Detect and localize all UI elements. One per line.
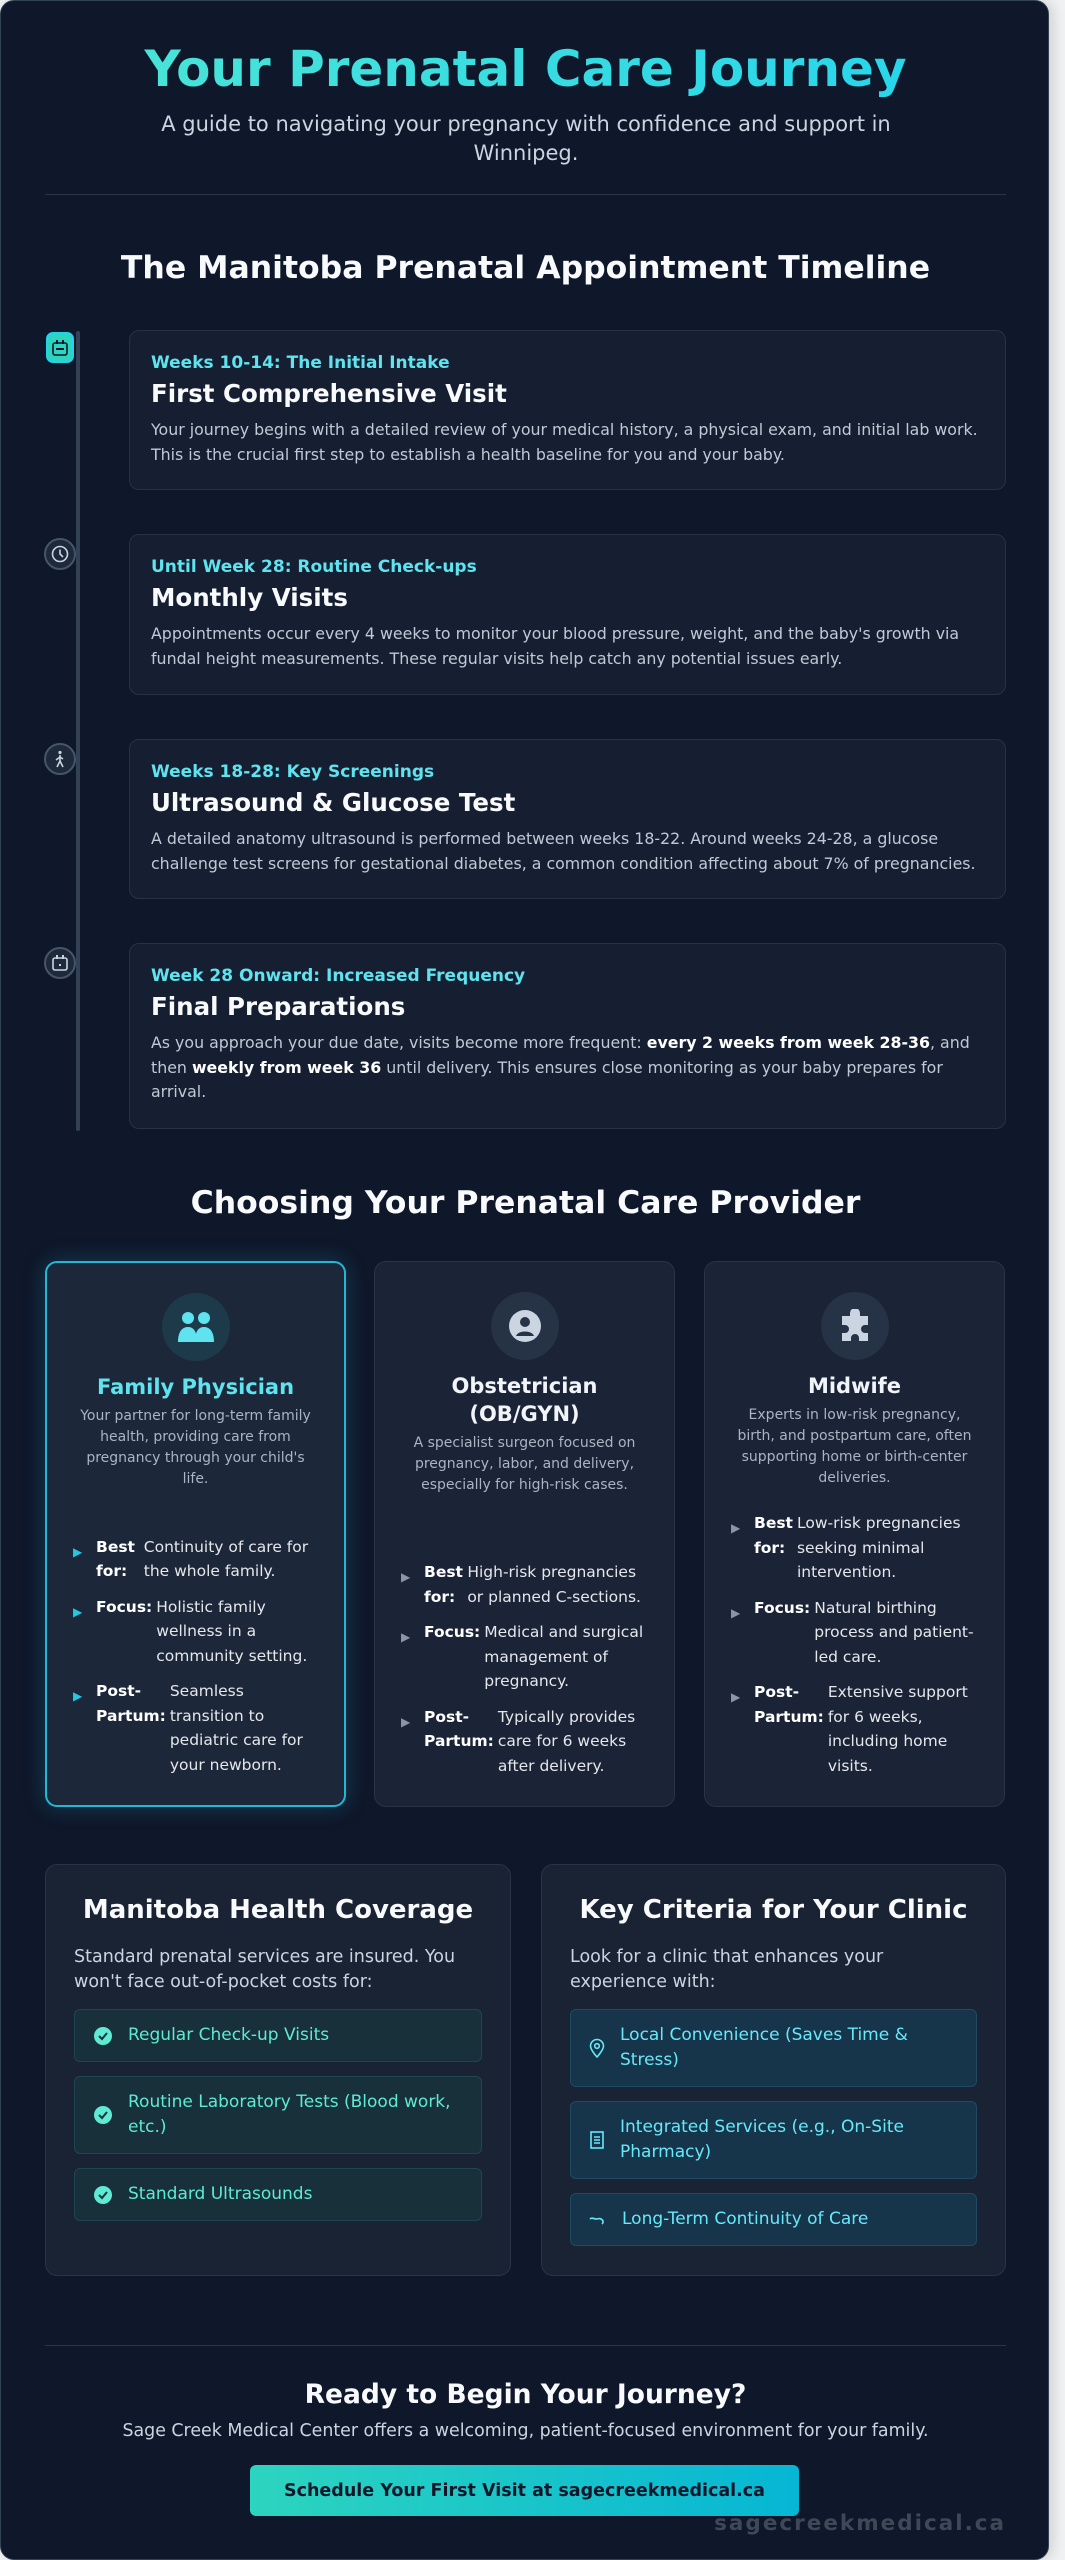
- panel: midwife: Midwife: [808, 1374, 901, 1398]
- subtitle: A guide to navigating your pregnancy with confidence and support in Winnipeg.: [161, 112, 891, 165]
- icon: family: [162, 1293, 230, 1361]
- card: final preparations: [129, 943, 1006, 1129]
- item: ultrasounds: Standard Ultrasounds: [128, 2184, 312, 2204]
- panel: obstetrician: (OB/GYN): [469, 1402, 580, 1426]
- panel: midwife: ▶: [731, 1606, 740, 1620]
- panel: family physician: Family Physician: [97, 1375, 294, 1399]
- item: ultrasounds: [74, 2168, 482, 2221]
- panel: obstetrician: Post-Partum:: [424, 1708, 494, 1750]
- card: ultrasound: Weeks 18-28: Key Screenings: [151, 762, 434, 782]
- item: convenience: Local Convenience (Saves Time & Stress): [620, 2025, 908, 2070]
- button: schedule: [250, 2465, 799, 2516]
- icon: doctor: [490, 1292, 558, 1360]
- panel: obstetrician: ▶: [401, 1630, 410, 1644]
- heading: timeline: The Manitoba Prenatal Appointment Timeline: [121, 250, 930, 286]
- panel: clinic criteria: Key Criteria for Your Clinic: [579, 1895, 968, 1925]
- panel: midwife: Extensive support for 6 weeks, including home visits.: [828, 1683, 968, 1774]
- panel: obstetrician: A specialist surgeon focused on pregnancy, labor, and delivery, especially for high-risk cases.: [414, 1435, 635, 1493]
- icon: walking: [44, 743, 76, 775]
- panel: midwife: Natural birthing process and patient-led care.: [814, 1598, 974, 1666]
- card: ultrasound: [129, 739, 1006, 899]
- panel: obstetrician: ▶: [401, 1714, 410, 1728]
- panel: midwife: Experts in low-risk pregnancy, birth, and postpartum care, often supporting home or birth-center deliveries.: [738, 1407, 971, 1486]
- card: ultrasound: Ultrasound & Glucose Test: [151, 788, 515, 817]
- icon: calendar check: [44, 947, 76, 979]
- card: first visit: Weeks 10-14: The Initial Intake: [151, 353, 450, 373]
- button: schedule: Schedule Your First Visit at sagecreekmedical.ca: [284, 2480, 765, 2500]
- panel: obstetrician: [374, 1261, 675, 1807]
- panel: family physician: Best for:: [96, 1538, 135, 1580]
- panel: obstetrician: Focus:: [424, 1623, 480, 1641]
- panel: family physician: Holistic family wellness in a community setting.: [156, 1598, 307, 1664]
- item: checkup: Regular Check-up Visits: [128, 2025, 329, 2045]
- panel: obstetrician: Typically provides care for 6 weeks after delivery.: [498, 1708, 635, 1774]
- card: monthly visits: [129, 534, 1006, 695]
- item: continuity: [570, 2193, 977, 2246]
- card: ultrasound: A detailed anatomy ultrasound is performed between weeks 18-22. Around weeks 24-28, a glucose challenge test screens for gestational diabetes, a common condition affecting about 7% of pregnancies.: [151, 829, 976, 872]
- footer text: Sage Creek Medical Center offers a welcoming, patient-focused environment for your family.: [122, 2421, 929, 2441]
- icon: puzzle: [820, 1292, 888, 1360]
- item: integrated services: Integrated Services (e.g., On-Site Pharmacy): [620, 2117, 904, 2162]
- panel: family physician: ▶: [73, 1604, 82, 1618]
- panel: family physician: Continuity of care for the whole family.: [144, 1538, 308, 1580]
- panel: clinic criteria: Look for a clinic that enhances your experience with:: [570, 1947, 883, 1992]
- item: lab tests: Routine Laboratory Tests (Blood work, etc.): [128, 2092, 451, 2137]
- footer heading: Ready to Begin Your Journey?: [305, 2379, 746, 2410]
- item: continuity: Long-Term Continuity of Care: [622, 2209, 868, 2229]
- panel: obstetrician: Medical and surgical management of pregnancy.: [484, 1623, 643, 1690]
- heading: providers: Choosing Your Prenatal Care Provider: [191, 1185, 860, 1221]
- panel: midwife: Focus:: [754, 1598, 810, 1616]
- panel: family physician: ▶: [73, 1689, 82, 1703]
- panel: midwife: ▶: [731, 1521, 740, 1535]
- panel: family physician: ▶: [73, 1544, 82, 1558]
- panel: midwife: Best for:: [754, 1514, 793, 1556]
- item: integrated services: [570, 2101, 977, 2179]
- item: checkup: [74, 2009, 482, 2062]
- panel: midwife: Post-Partum:: [754, 1683, 824, 1726]
- card: monthly visits: Monthly Visits: [151, 583, 348, 612]
- title: Your Prenatal Care Journey: [144, 40, 907, 98]
- panel: obstetrician: ▶: [401, 1570, 410, 1584]
- card: final preparations: As you approach your due date, visits become more frequent: every 2 weeks from week 28-36, and then weekly from week 36 until delivery. This ensures close monitoring as your baby prepares for arrival.: [151, 1033, 970, 1101]
- item: convenience: [570, 2009, 977, 2087]
- panel: clinic criteria: [541, 1864, 1006, 2276]
- card: first visit: Your journey begins with a detailed review of your medical history, a physical exam, and initial lab work. This is the crucial first step to establish a health baseline for you and your baby.: [151, 420, 978, 464]
- panel: obstetrician: Best for:: [424, 1563, 463, 1606]
- card: monthly visits: Appointments occur every 4 weeks to monitor your blood pressure, weight, and the baby's growth via fundal height measurements. These regular visits help catch any potential issues early.: [151, 624, 959, 668]
- panel: obstetrician: High-risk pregnancies or planned C-sections.: [467, 1563, 641, 1606]
- panel: family physician: Seamless transition to pediatric care for your newborn.: [170, 1682, 303, 1774]
- panel: midwife: Low-risk pregnancies seeking minimal intervention.: [797, 1514, 961, 1581]
- card: final preparations: Week 28 Onward: Increased Frequency: [151, 966, 525, 986]
- panel: health coverage: [45, 1864, 511, 2276]
- card: first visit: [129, 330, 1006, 490]
- card: first visit: First Comprehensive Visit: [151, 379, 507, 408]
- watermark: sagecreekmedical.ca: [714, 2511, 1006, 2536]
- panel: family physician: [45, 1261, 346, 1807]
- panel: midwife: [704, 1261, 1005, 1807]
- panel: family physician: Post-Partum:: [96, 1682, 166, 1724]
- card: monthly visits: Until Week 28: Routine Check-ups: [151, 557, 477, 577]
- item: lab tests: [74, 2076, 482, 2154]
- panel: obstetrician: Obstetrician: [451, 1374, 598, 1398]
- panel: health coverage: Standard prenatal services are insured. You won't face out-of-pocket costs for:: [74, 1947, 455, 1992]
- icon: clock: [44, 538, 76, 570]
- panel: family physician: Focus:: [96, 1598, 152, 1616]
- icon: calendar: [46, 332, 74, 363]
- timeline line: [76, 331, 80, 1131]
- panel: midwife: ▶: [731, 1690, 740, 1704]
- card: final preparations: Final Preparations: [151, 992, 405, 1021]
- panel: health coverage: Manitoba Health Coverage: [83, 1895, 473, 1925]
- panel: family physician: Your partner for long-term family health, providing care from pregnancy through your child's life.: [80, 1408, 311, 1487]
